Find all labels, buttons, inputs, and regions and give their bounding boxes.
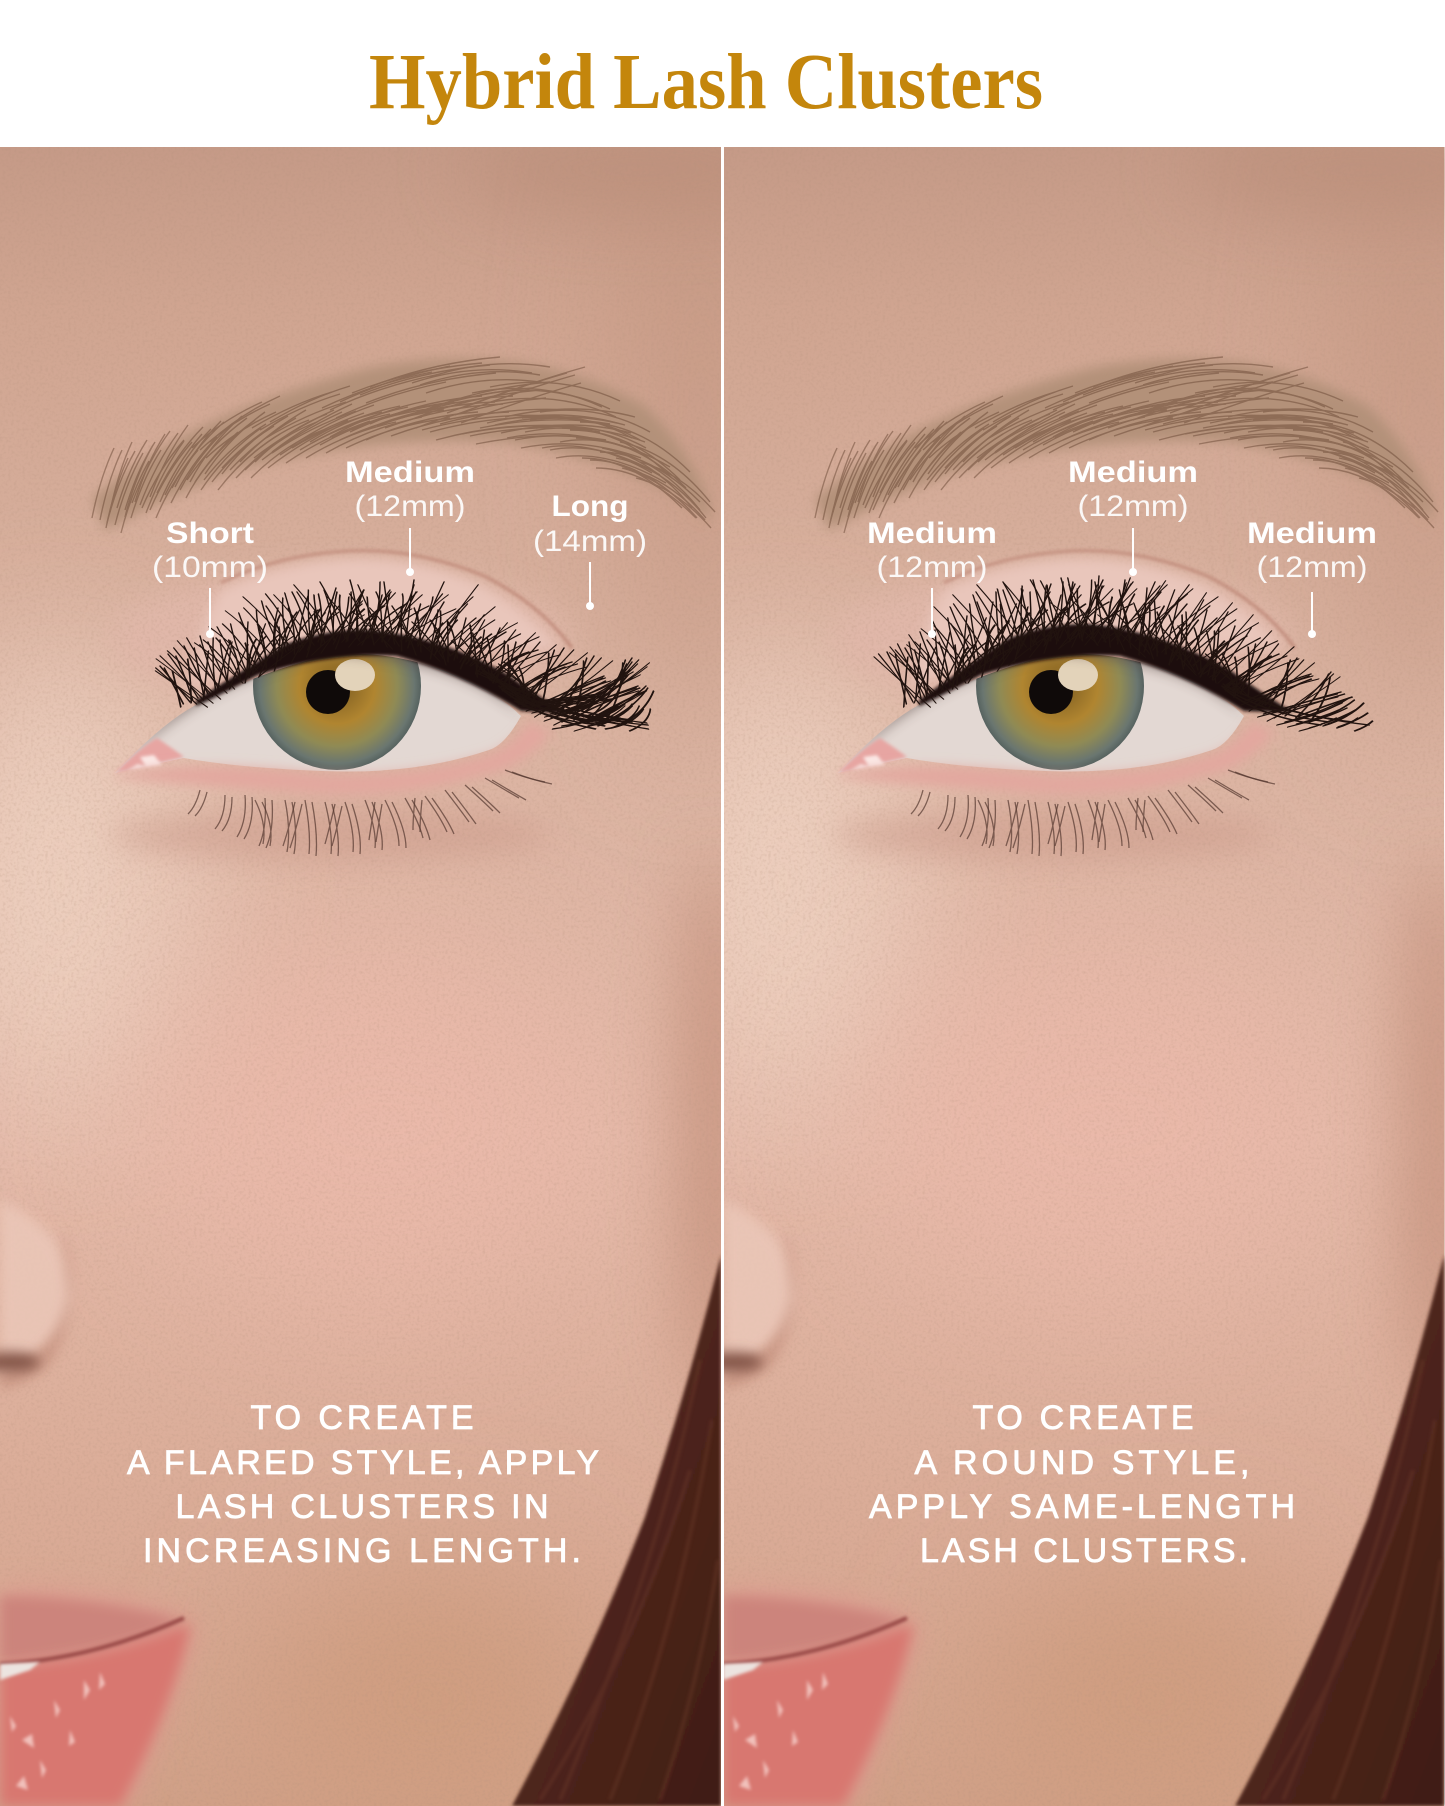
label: outer medium 12mm: Medium <box>1247 517 1377 550</box>
label: centre medium 12mm: Medium <box>1068 456 1198 489</box>
lash length labels <box>152 456 647 638</box>
portrait: right face <box>724 147 1445 1806</box>
label: long 14mm: Long <box>552 490 628 523</box>
caption: round style: LASH CLUSTERS. <box>920 1532 1248 1570</box>
label: outer medium 12mm <box>1247 517 1377 638</box>
caption: flared style <box>127 1399 599 1570</box>
caption: flared style: A FLARED STYLE, APPLY <box>127 1444 599 1482</box>
header background <box>0 0 1445 147</box>
caption: flared style: LASH CLUSTERS IN <box>176 1488 548 1526</box>
caption: round style <box>869 1399 1295 1570</box>
label: medium 12mm: (12mm) <box>354 490 466 523</box>
title: Hybrid Lash Clusters <box>369 39 1043 126</box>
label: inner medium 12mm: (12mm) <box>876 551 988 584</box>
label: medium 12mm <box>345 456 475 576</box>
label: long 14mm: (14mm) <box>533 525 647 558</box>
caption: flared style: INCREASING LENGTH. <box>143 1532 581 1570</box>
caption: round style: APPLY SAME-LENGTH <box>869 1488 1295 1526</box>
label: medium 12mm: Medium <box>345 456 475 489</box>
panel: round style <box>724 147 1445 1806</box>
caption: round style: A ROUND STYLE, <box>914 1444 1250 1482</box>
portrait: left face <box>0 147 721 1806</box>
caption: round style: TO CREATE <box>972 1399 1194 1437</box>
divider <box>721 147 724 1806</box>
panel: flared style <box>0 147 721 1806</box>
caption: flared style: TO CREATE <box>250 1399 474 1437</box>
label: short 10mm <box>152 517 268 638</box>
lashes: flared set <box>154 579 654 732</box>
label: long 14mm <box>533 490 647 610</box>
label: outer medium 12mm: (12mm) <box>1256 551 1368 584</box>
label: short 10mm: (10mm) <box>152 551 268 584</box>
label: centre medium 12mm <box>1068 456 1198 576</box>
lashes: round set <box>873 575 1374 732</box>
label: centre medium 12mm: (12mm) <box>1078 490 1188 523</box>
label: short 10mm: Short <box>166 517 254 550</box>
lash length labels <box>867 456 1377 638</box>
label: inner medium 12mm <box>867 517 997 638</box>
label: inner medium 12mm: Medium <box>867 517 997 550</box>
